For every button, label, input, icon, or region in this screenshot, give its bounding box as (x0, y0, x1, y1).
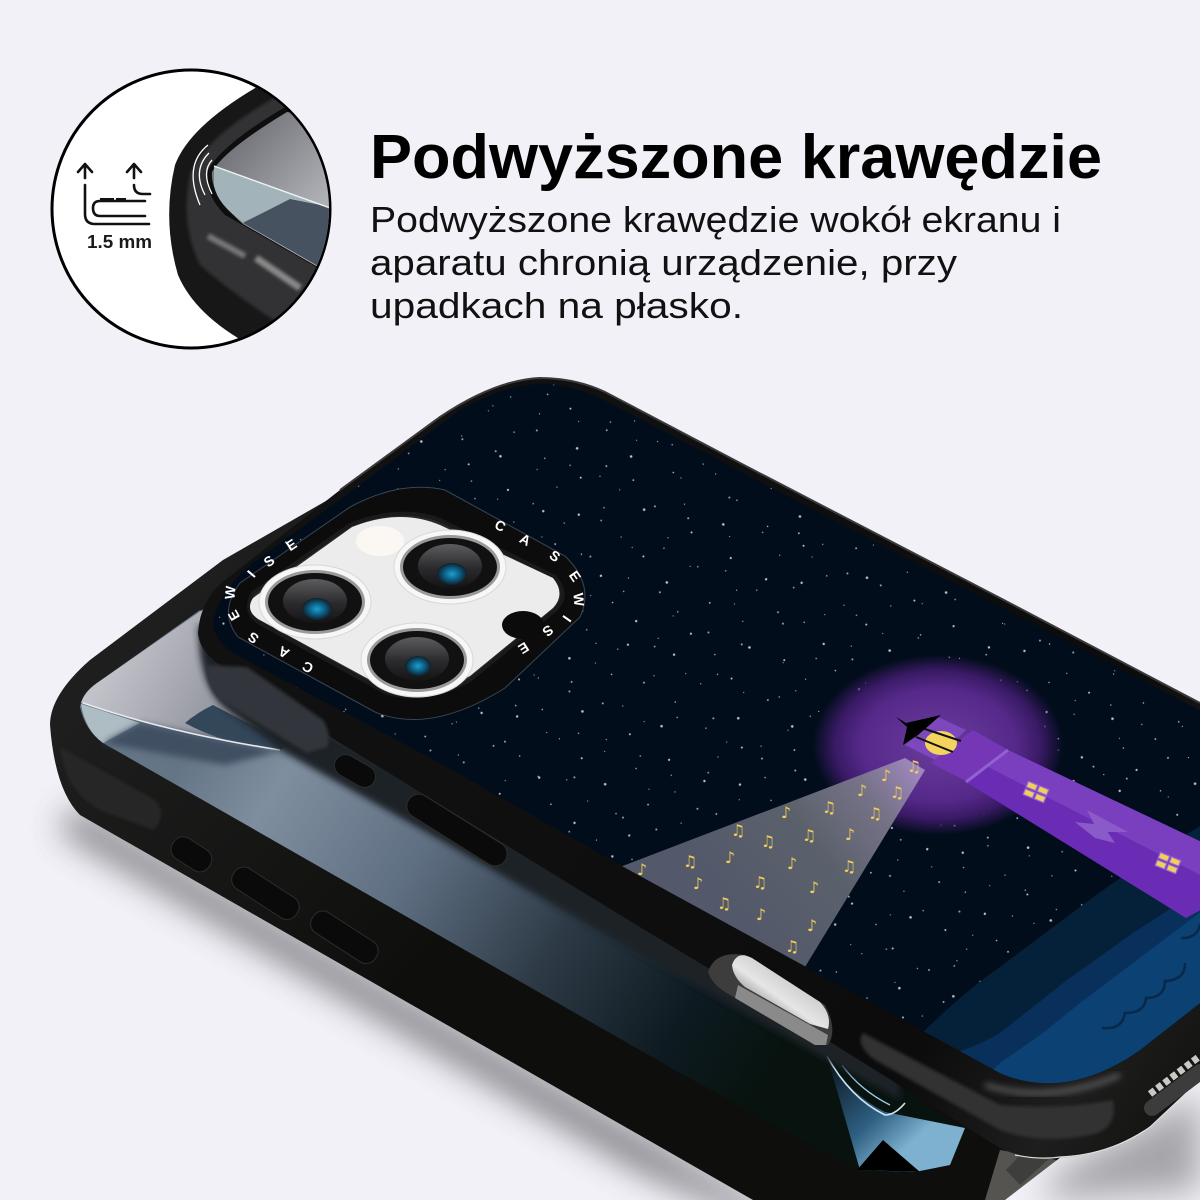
camera plate (250, 517, 559, 692)
description text: aparatu chronią urządzenie, przy (370, 242, 957, 283)
back phone (50, 470, 1200, 1200)
back phone carbon patch (60, 747, 161, 830)
CASEWISE ring lettering: I (559, 613, 575, 625)
music notes: ♪ (857, 781, 867, 800)
music notes: ♪ (845, 825, 855, 844)
inner bevel (249, 514, 562, 696)
charging port (708, 954, 832, 1045)
night sky (213, 384, 1200, 1031)
description text: Podwyższone krawędzie wokół ekranu i (370, 199, 1061, 240)
side carbon patch (207, 665, 329, 753)
CASEWISE ring lettering: S (245, 629, 262, 647)
music notes: ♫ (842, 857, 856, 876)
music notes: ♫ (731, 821, 745, 840)
CASEWISE ring lettering: S (260, 552, 278, 570)
lens: bottom (361, 623, 473, 697)
sea layers (924, 826, 1200, 1084)
description text: upadkach na płasko. (370, 285, 743, 326)
callout: raised edge detail circle (52, 70, 360, 348)
emblem (1075, 810, 1128, 843)
front phone frame (198, 378, 1200, 1158)
music notes: ♫ (822, 798, 836, 817)
back phone screen (80, 608, 965, 1174)
flash (356, 526, 404, 556)
speaker grille (1150, 1056, 1200, 1108)
title: Podwyższone krawędzie (370, 123, 1102, 192)
wallpaper glow and arcs (827, 1056, 965, 1172)
CASEWISE ring lettering: W (570, 592, 588, 608)
music notes (637, 757, 921, 956)
top edge highlight (340, 378, 1200, 703)
tower (966, 750, 1200, 918)
icon: impact arcs (193, 145, 212, 205)
CASEWISE ring lettering: W (221, 585, 239, 600)
back phone buttons (167, 832, 382, 968)
windows (1023, 781, 1181, 874)
music notes: ♫ (907, 757, 921, 776)
CASEWISE ring lettering: S (539, 622, 557, 640)
music notes: ♪ (881, 766, 891, 785)
music notes: ♫ (890, 783, 904, 802)
lidar sensor (502, 611, 544, 639)
music notes: ♫ (753, 873, 767, 892)
lower corner gloss (861, 1033, 1120, 1139)
music notes: ♫ (802, 826, 816, 845)
icon: device chips (100, 198, 126, 202)
lamp room (905, 717, 966, 760)
music notes: ♫ (785, 937, 799, 956)
music notes: ♪ (807, 916, 817, 935)
icon: raised edge diagram (78, 164, 150, 224)
gallery (931, 730, 1008, 782)
CASEWISE ring lettering: E (566, 568, 584, 585)
front phone screen artwork (200, 370, 1200, 1100)
phone shadow (60, 808, 1200, 1200)
railing (916, 727, 961, 752)
music notes: ♪ (693, 874, 703, 893)
back phone port (1006, 1155, 1050, 1185)
music notes: ♫ (761, 832, 775, 851)
lamp (925, 731, 957, 755)
music notes: ♪ (637, 860, 647, 879)
description text (370, 199, 1061, 326)
front phone (198, 370, 1200, 1158)
bottom edge highlight (1015, 1080, 1200, 1158)
thickness label: 1.5 mm (87, 232, 152, 252)
back phone translucent corner (985, 1150, 1057, 1200)
purple glow (813, 655, 1063, 835)
music notes: ♪ (809, 878, 819, 897)
music notes: ♫ (717, 894, 731, 913)
CASEWISE ring lettering: E (283, 536, 300, 554)
CASEWISE ring lettering: E (224, 607, 243, 624)
CASEWISE ring lettering: A (517, 530, 534, 549)
back phone frame (50, 470, 1200, 1200)
bump ring (228, 487, 585, 720)
CASEWISE ring lettering: C (299, 658, 316, 677)
lens: top right (394, 530, 506, 604)
music notes: ♪ (781, 803, 791, 822)
CASEWISE ring lettering: I (244, 567, 259, 580)
stars (219, 384, 1197, 1019)
music notes: ♫ (683, 852, 697, 871)
lighthouse (896, 715, 1200, 918)
CASEWISE ring lettering: E (515, 639, 532, 658)
music notes: ♪ (756, 905, 766, 924)
CASEWISE ring lettering: A (275, 643, 292, 662)
music notes: ♫ (868, 804, 882, 823)
CASEWISE ring lettering: S (546, 547, 563, 565)
camera bump (221, 487, 588, 720)
translucent side wall (198, 625, 900, 1100)
roof (896, 715, 941, 745)
waves (1103, 925, 1200, 1028)
music notes: ♪ (787, 854, 797, 873)
light beam (620, 758, 925, 967)
front phone side switch and button (330, 750, 512, 870)
CASEWISE ring lettering (221, 516, 588, 677)
phone corner close-up (169, 88, 329, 338)
CASEWISE ring lettering: C (492, 516, 509, 535)
music notes: ♪ (725, 848, 735, 867)
lens: left (259, 565, 371, 639)
